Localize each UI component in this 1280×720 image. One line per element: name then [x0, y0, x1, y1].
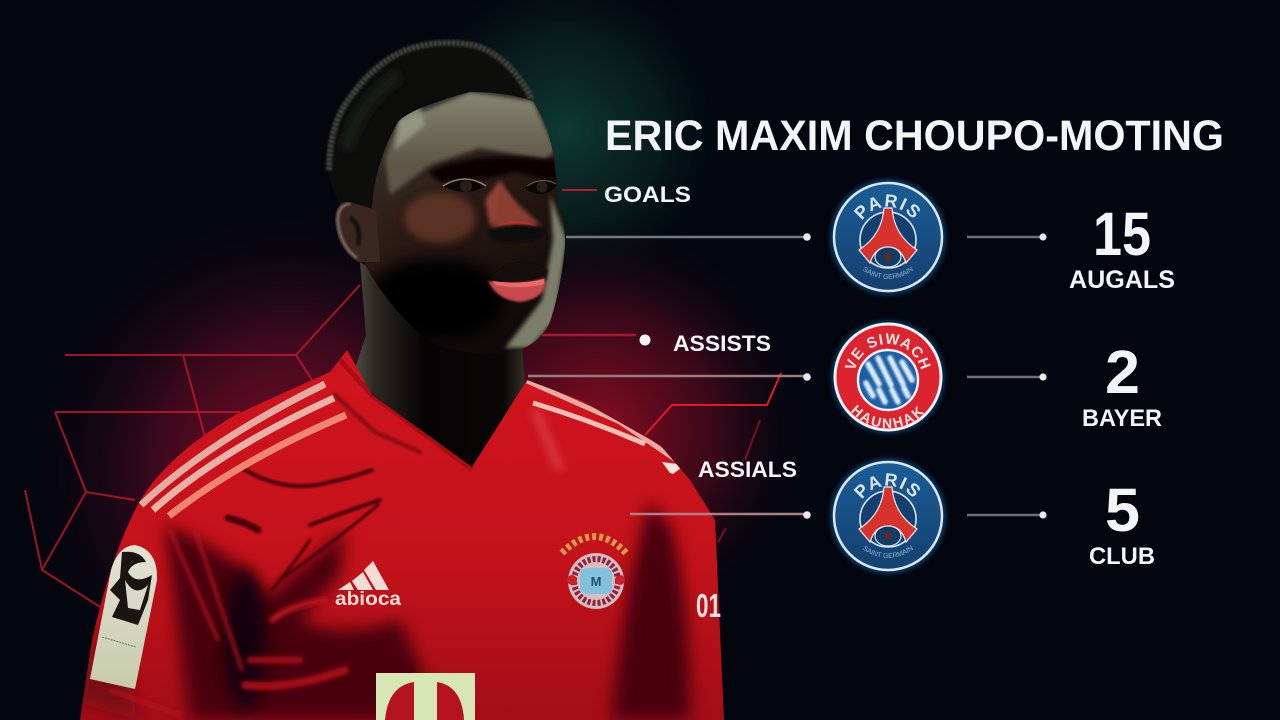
shoulder stripes right [527, 381, 682, 464]
assists label: ASSISTS [673, 331, 771, 356]
chest crest [562, 536, 626, 609]
sleeve patch [90, 545, 157, 689]
stat: 15 augals [1069, 200, 1175, 294]
nose [488, 185, 545, 243]
sponsor T logo [376, 673, 475, 720]
jersey shadows and folds [68, 395, 690, 720]
stat: 15 augals: 15 [1093, 200, 1151, 268]
red network lines [25, 285, 781, 610]
shoulder stripes left [141, 384, 346, 516]
badge: PSG top: SAINT GERMAIN [863, 266, 914, 279]
badge: PSG bottom [828, 456, 948, 576]
stat: 5 club: 5 [1105, 476, 1140, 544]
badge: PSG bottom: SAINT GERMAIN [863, 546, 914, 558]
player [68, 41, 740, 720]
badge: PSG top [828, 176, 948, 298]
goals label [562, 182, 691, 207]
badge: Bayern: HAUNHAK [851, 404, 924, 428]
stat: 2 bayer: 2 [1105, 338, 1140, 406]
jersey [68, 340, 740, 720]
neck [352, 262, 525, 470]
sleeve number: 01 [696, 587, 721, 624]
right connector lines [967, 233, 1047, 519]
stat: 5 club: CLUB [1089, 543, 1155, 570]
badge: Bayern [828, 318, 948, 436]
stat: 2 bayer: BAYER [1082, 405, 1162, 432]
ear [335, 202, 380, 262]
chest crest: M [591, 574, 601, 589]
mouth [488, 263, 548, 302]
assists label [542, 331, 771, 356]
eyes [443, 179, 557, 194]
goals label: GOALS [604, 182, 691, 207]
stat: 15 augals: AUGALS [1069, 266, 1175, 294]
badge: Bayern: VE SIWACH [844, 333, 931, 370]
adidas logo: abioca [335, 589, 401, 610]
assials label: ASSIALS [698, 457, 797, 482]
connector lines to badges [528, 233, 811, 519]
stat: 2 bayer [1082, 338, 1162, 432]
badge: PSG bottom: PARIS [854, 473, 920, 499]
adidas logo [335, 561, 401, 610]
face [365, 92, 565, 354]
badge: PSG top: PARIS [854, 194, 920, 220]
head hair [326, 41, 533, 212]
stat: 5 club [1089, 476, 1155, 570]
facial shading [365, 92, 567, 348]
title: ERIC MAXIM CHOUPO-MOTING [605, 112, 1224, 160]
